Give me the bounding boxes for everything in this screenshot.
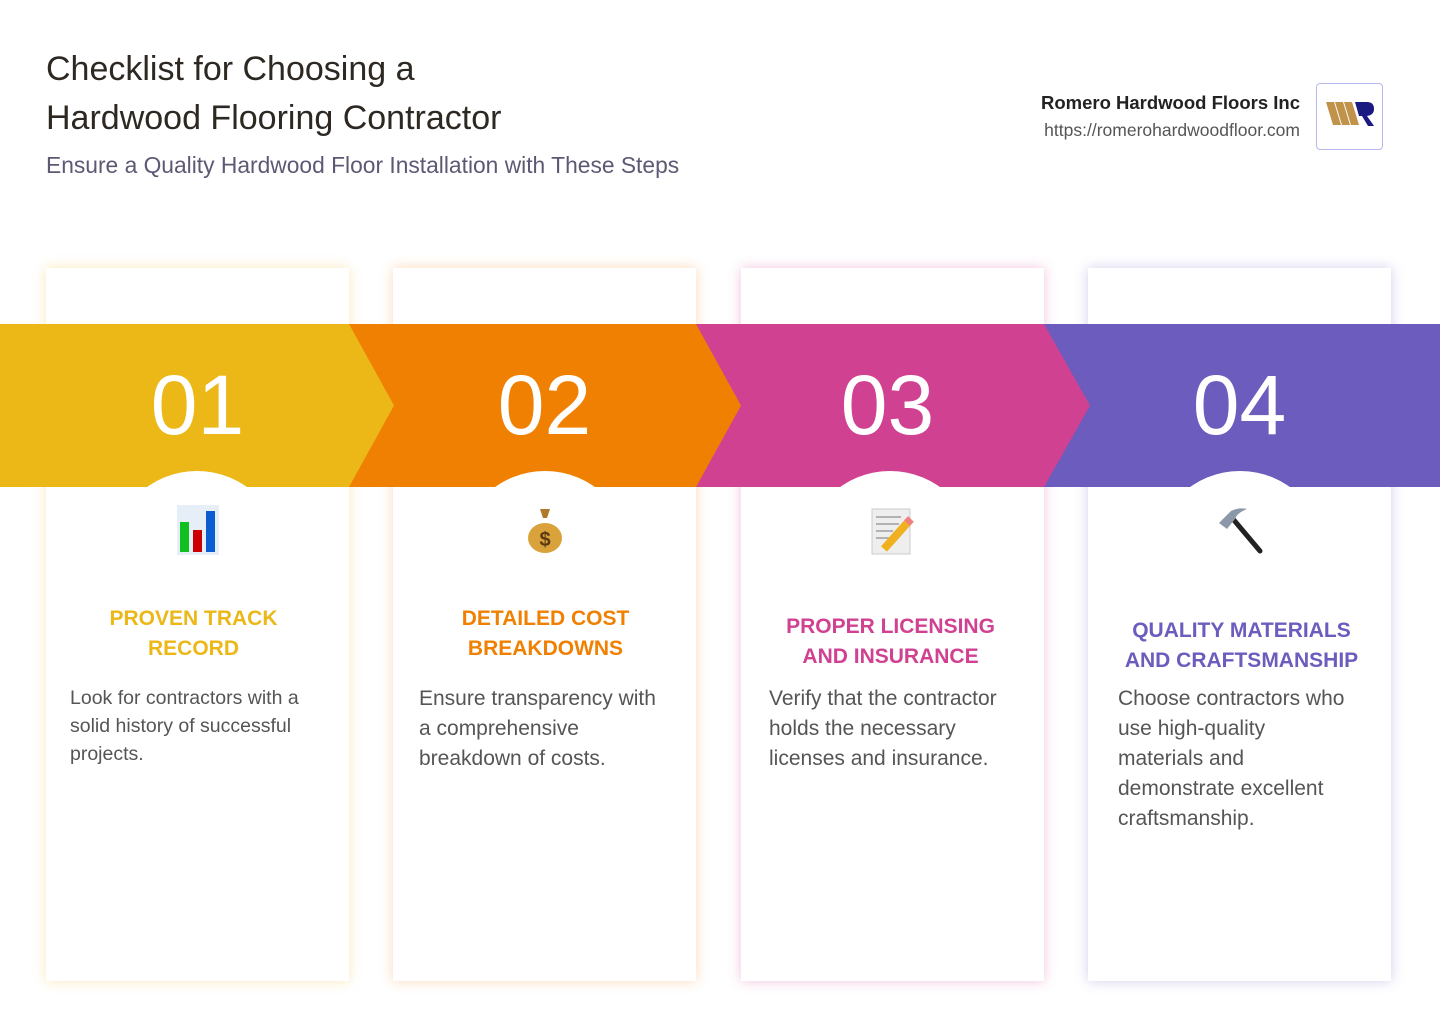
number 01: 01: [151, 358, 244, 452]
card 1: [46, 268, 349, 981]
heading 4: [1125, 619, 1358, 672]
heading 2: BREAKDOWNS: [468, 637, 623, 660]
heading 2: DETAILED COST: [462, 607, 629, 630]
card 3: [741, 268, 1044, 981]
brand: [1041, 83, 1383, 150]
number 03: 03: [841, 358, 934, 452]
brand name: Romero Hardwood Floors Inc: [1041, 92, 1300, 113]
heading 3: AND INSURANCE: [802, 645, 979, 668]
heading 3: PROPER LICENSING: [786, 615, 995, 638]
heading 4: AND CRAFTSMANSHIP: [1125, 649, 1358, 672]
text 4: Choose contractors who use high-quality materials and demonstrate excellent craftsmanship.: [1118, 687, 1344, 830]
card 2: [393, 268, 696, 981]
banner arrows: [0, 324, 1440, 487]
circles: [111, 471, 283, 643]
text 1: Look for contractors with a solid history of successful projects.: [70, 687, 299, 765]
icon: memo: [872, 508, 914, 554]
title: Checklist for Choosing a: [46, 50, 415, 88]
heading 4: QUALITY MATERIALS: [1132, 619, 1351, 642]
title: Hardwood Flooring Contractor: [46, 99, 501, 137]
icon: money bag: [528, 509, 562, 553]
heading 1: [109, 607, 278, 660]
icon: money bag: $: [539, 529, 550, 551]
heading 1: PROVEN TRACK: [109, 607, 278, 630]
card 4: [1088, 268, 1391, 981]
icon: hammer: [1219, 508, 1262, 554]
text 2: Ensure transparency with a comprehensive breakdown of costs.: [419, 687, 656, 770]
logo: [1316, 83, 1383, 150]
heading 2: [462, 607, 630, 660]
text 3: Verify that the contractor holds the necessary licenses and insurance.: [769, 687, 997, 770]
heading 3: [786, 615, 995, 668]
title: [46, 50, 501, 137]
heading 1: RECORD: [148, 637, 239, 660]
number 02: 02: [498, 358, 591, 452]
icon: bar chart: [177, 505, 219, 555]
number 04: 04: [1193, 358, 1286, 452]
brand url: https://romerohardwoodfloor.com: [1044, 120, 1300, 140]
subtitle: Ensure a Quality Hardwood Floor Installation with These Steps: [46, 152, 679, 178]
